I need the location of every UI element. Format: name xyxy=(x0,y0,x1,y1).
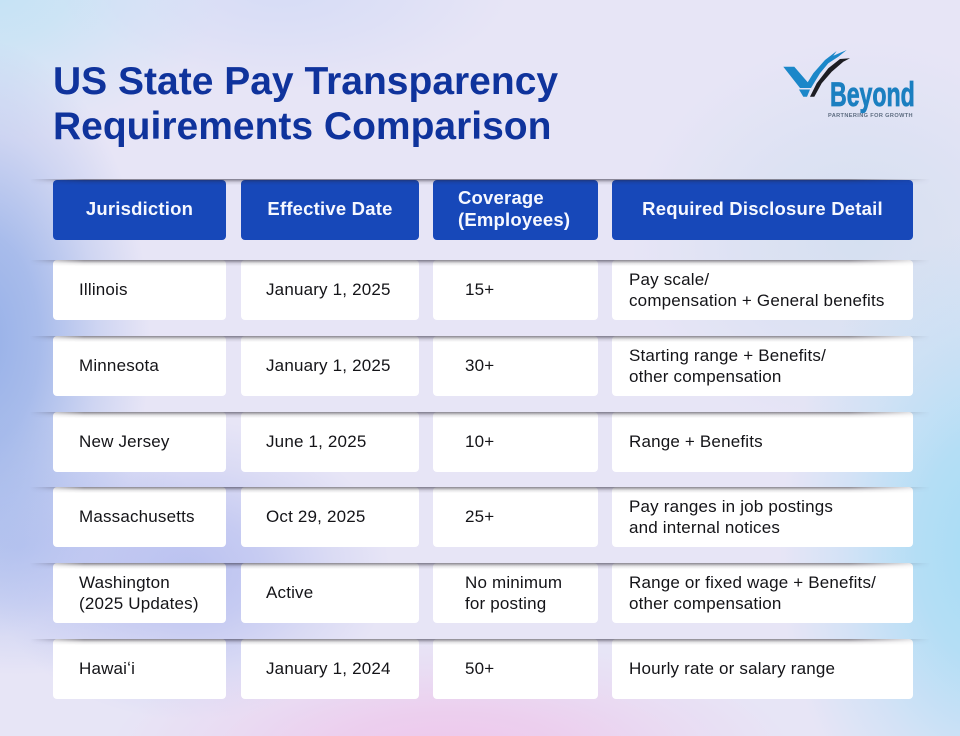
cell: date xyxy=(241,487,419,547)
cell: disclosure: other compensation xyxy=(629,594,782,613)
row: New Jersey xyxy=(34,412,924,472)
header: Coverage (Employees) xyxy=(433,180,598,240)
header: Effective Date xyxy=(241,180,419,240)
logo wordmark: Beyond xyxy=(830,76,915,114)
cell: date xyxy=(241,639,419,699)
cell: disclosure: Pay scale/ xyxy=(629,270,709,288)
cell: date: Oct 29, 2025 xyxy=(266,507,366,526)
cell: coverage xyxy=(433,412,598,472)
cell: coverage: 10+ xyxy=(465,432,494,451)
cell: disclosure: Range + Benefits xyxy=(629,432,763,451)
header: Required Disclosure Detail xyxy=(612,180,913,240)
cell: coverage xyxy=(433,487,598,547)
cell: jurisdiction xyxy=(53,487,226,547)
cell: jurisdiction xyxy=(53,336,226,396)
cell: coverage: for posting xyxy=(465,594,546,613)
cell: coverage xyxy=(433,563,598,623)
cell: coverage: 50+ xyxy=(465,659,494,678)
header: Effective Date: Effective Date xyxy=(267,198,393,219)
cell: date: June 1, 2025 xyxy=(266,432,366,451)
row: Minnesota xyxy=(34,336,924,396)
cell: date: January 1, 2024 xyxy=(266,659,391,678)
cell: date: January 1, 2025 xyxy=(266,280,391,299)
cell: date xyxy=(241,563,419,623)
cell: date: Active xyxy=(266,583,313,602)
header: Jurisdiction: Jurisdiction xyxy=(86,198,193,219)
cell: jurisdiction xyxy=(53,412,226,472)
cell: date xyxy=(241,336,419,396)
row: Illinois xyxy=(34,260,924,320)
row: Hawaii xyxy=(34,639,924,699)
cell: jurisdiction: Minnesota xyxy=(79,356,159,375)
cell: disclosure xyxy=(612,487,913,547)
cell: jurisdiction: Massachusetts xyxy=(79,507,195,526)
table header row xyxy=(34,179,924,240)
header: Coverage (Employees): (Employees) xyxy=(458,208,570,230)
cell: disclosure: Hourly rate or salary range xyxy=(629,659,835,678)
cell: disclosure xyxy=(612,412,913,472)
row: Massachusetts xyxy=(34,487,924,547)
cell: coverage: 25+ xyxy=(465,507,494,526)
icon: blue and black check mark xyxy=(783,50,850,97)
cell: jurisdiction: Washington xyxy=(79,572,170,592)
cell: disclosure: and internal notices xyxy=(629,518,780,537)
cell: date xyxy=(241,260,419,320)
cell: disclosure: Range or fixed wage + Benefits/ xyxy=(629,572,876,592)
cell: coverage xyxy=(433,639,598,699)
cell: disclosure: Pay ranges in job postings xyxy=(629,496,833,516)
cell: disclosure xyxy=(612,336,913,396)
title xyxy=(53,60,558,148)
cell: disclosure xyxy=(612,563,913,623)
cell: disclosure: compensation + General benefits xyxy=(629,291,885,310)
cell: coverage: 15+ xyxy=(465,280,494,299)
logo: Beyond, partnering for growth xyxy=(783,50,915,119)
cell: disclosure xyxy=(612,639,913,699)
cell: jurisdiction: Hawaiʻi xyxy=(79,659,135,678)
cell: date: January 1, 2025 xyxy=(266,356,391,375)
cell: disclosure: other compensation xyxy=(629,367,782,386)
cell: date xyxy=(241,412,419,472)
cell: coverage xyxy=(433,260,598,320)
cell: jurisdiction xyxy=(53,639,226,699)
cell: coverage: No minimum xyxy=(465,572,562,592)
cell: disclosure: Starting range + Benefits/ xyxy=(629,346,826,364)
cell: jurisdiction xyxy=(53,563,226,623)
row: Washington xyxy=(34,563,924,623)
header: Jurisdiction xyxy=(53,180,226,240)
logo tagline: PARTNERING FOR GROWTH xyxy=(828,113,913,119)
cell: jurisdiction: New Jersey xyxy=(79,432,170,451)
cell: coverage xyxy=(433,336,598,396)
cell: coverage: 30+ xyxy=(465,356,494,375)
cell: disclosure xyxy=(612,260,913,320)
title: US State Pay Transparency xyxy=(53,60,558,103)
cell: jurisdiction xyxy=(53,260,226,320)
cell: jurisdiction: Illinois xyxy=(79,280,128,299)
header: Required Disclosure Detail: Required Disclosure Detail xyxy=(642,198,883,219)
cell: jurisdiction: (2025 Updates) xyxy=(79,594,199,613)
title: Requirements Comparison xyxy=(53,104,551,148)
header: Coverage (Employees): Coverage xyxy=(458,187,544,208)
